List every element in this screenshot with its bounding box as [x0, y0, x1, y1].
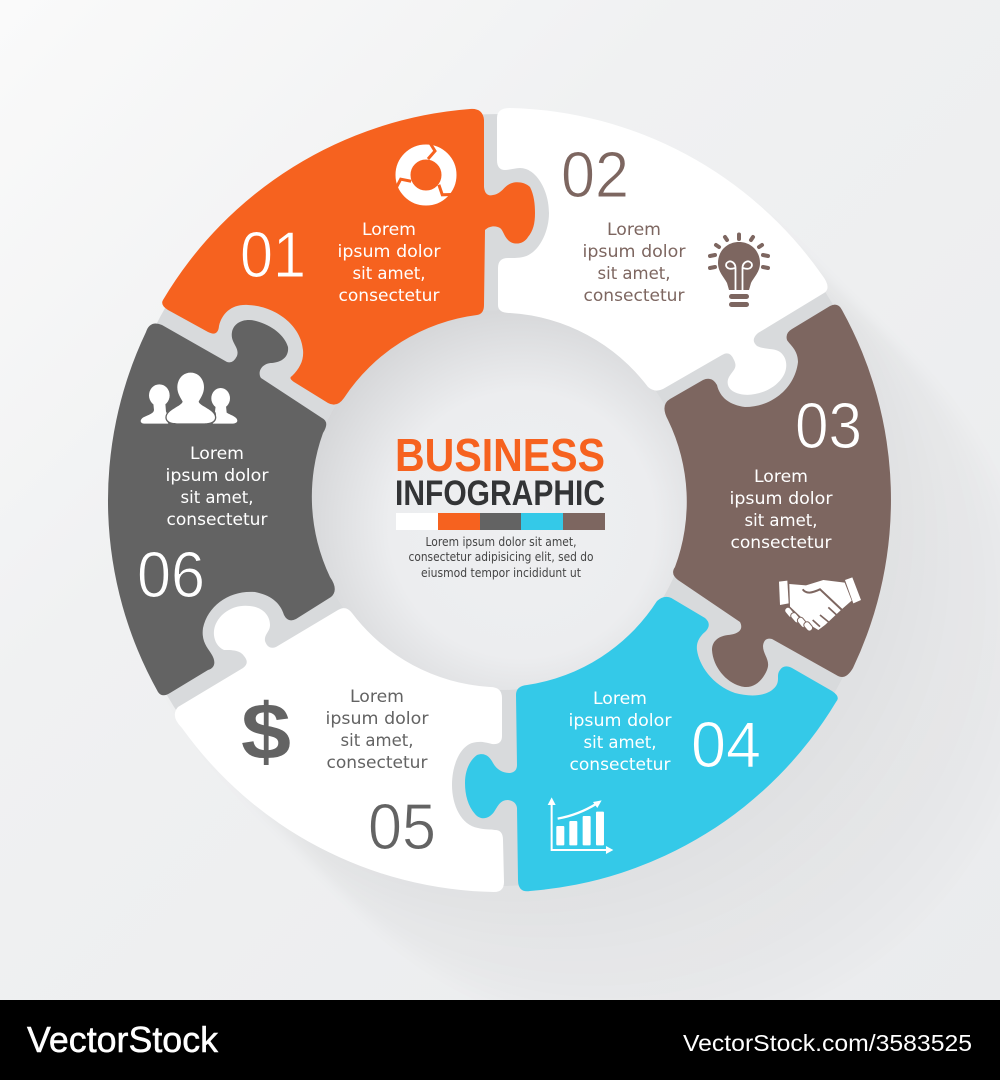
text block 03: sit amet, — [744, 511, 818, 530]
number 05: 05 — [368, 790, 436, 863]
text block 04 — [568, 689, 672, 774]
text block 06: ipsum dolor — [166, 466, 269, 485]
panel: step 04 blue — [465, 597, 838, 891]
panel: central title block — [395, 429, 605, 580]
panel: step 03 brown — [664, 305, 891, 687]
icon: light bulb — [710, 234, 768, 307]
panel: step 01 orange — [162, 109, 535, 405]
number 03: 03 — [795, 389, 862, 462]
footer image id text: VectorStock.com/3583525 — [683, 1030, 972, 1056]
caption text: eiusmod tempor incididunt ut — [421, 566, 581, 580]
caption text: Lorem ipsum dolor sit amet, — [426, 535, 576, 549]
number 04: 04 — [691, 708, 761, 781]
text block 03: consectetur — [730, 533, 832, 552]
number 06: 06 — [137, 538, 205, 611]
panel: step 05 white — [175, 606, 504, 892]
icon: handshake — [779, 577, 861, 632]
footer logo text: VectorStock — [27, 1019, 219, 1060]
text block 04: sit amet, — [584, 733, 656, 752]
text block 02: Lorem — [607, 220, 661, 239]
caption text: consectetur adipisicing elit, sed do — [408, 550, 594, 564]
puzzle piece 06 — [108, 320, 335, 695]
text block 05: consectetur — [326, 753, 428, 772]
text block 06: sit amet, — [180, 488, 254, 507]
text block 05: sit amet, — [340, 731, 414, 750]
text block 04: Lorem — [593, 689, 647, 708]
text block 04: ipsum dolor — [568, 711, 672, 730]
puzzle piece 03 — [664, 305, 891, 687]
panel: step 02 white — [497, 108, 828, 395]
puzzle piece 04 — [465, 597, 838, 891]
text block 01: ipsum dolor — [338, 242, 441, 261]
number 02: 02 — [561, 138, 629, 211]
text block 02: ipsum dolor — [582, 242, 686, 261]
text block 06: Lorem — [190, 444, 244, 463]
icon: dollar sign: $ — [241, 687, 291, 776]
text block 02: consectetur — [584, 286, 685, 305]
text block 05: ipsum dolor — [326, 709, 429, 728]
text block 06: consectetur — [166, 510, 268, 529]
text block 01: consectetur — [338, 286, 440, 305]
puzzle piece 01 — [162, 109, 535, 405]
text block 06 — [166, 444, 269, 529]
heading: infographic: INFOGRAPHIC — [395, 474, 605, 513]
heading: business: BUSINESS — [395, 429, 605, 481]
text block 03 — [730, 467, 833, 552]
colour strip legend — [396, 513, 605, 530]
footer bar — [0, 1000, 1000, 1080]
text block 01 — [338, 220, 441, 305]
text block 02 — [582, 220, 686, 305]
text block 05 — [326, 687, 429, 772]
number 01: 01 — [240, 218, 306, 291]
text block 04: consectetur — [570, 755, 671, 774]
text block 02: sit amet, — [598, 264, 670, 283]
text block 01: Lorem — [362, 220, 416, 239]
text block 03: Lorem — [754, 467, 808, 486]
text block 03: ipsum dolor — [730, 489, 833, 508]
puzzle piece 05 — [175, 606, 504, 892]
text block 01: sit amet, — [352, 264, 426, 283]
panel: step 06 dark grey — [108, 320, 335, 695]
caption text — [408, 535, 594, 580]
icon: group of people — [141, 373, 237, 424]
icon: bar chart with arrow — [548, 797, 613, 854]
puzzle piece 02 — [497, 108, 828, 395]
icon: refresh cycle — [394, 143, 453, 199]
text block 05: Lorem — [350, 687, 404, 706]
